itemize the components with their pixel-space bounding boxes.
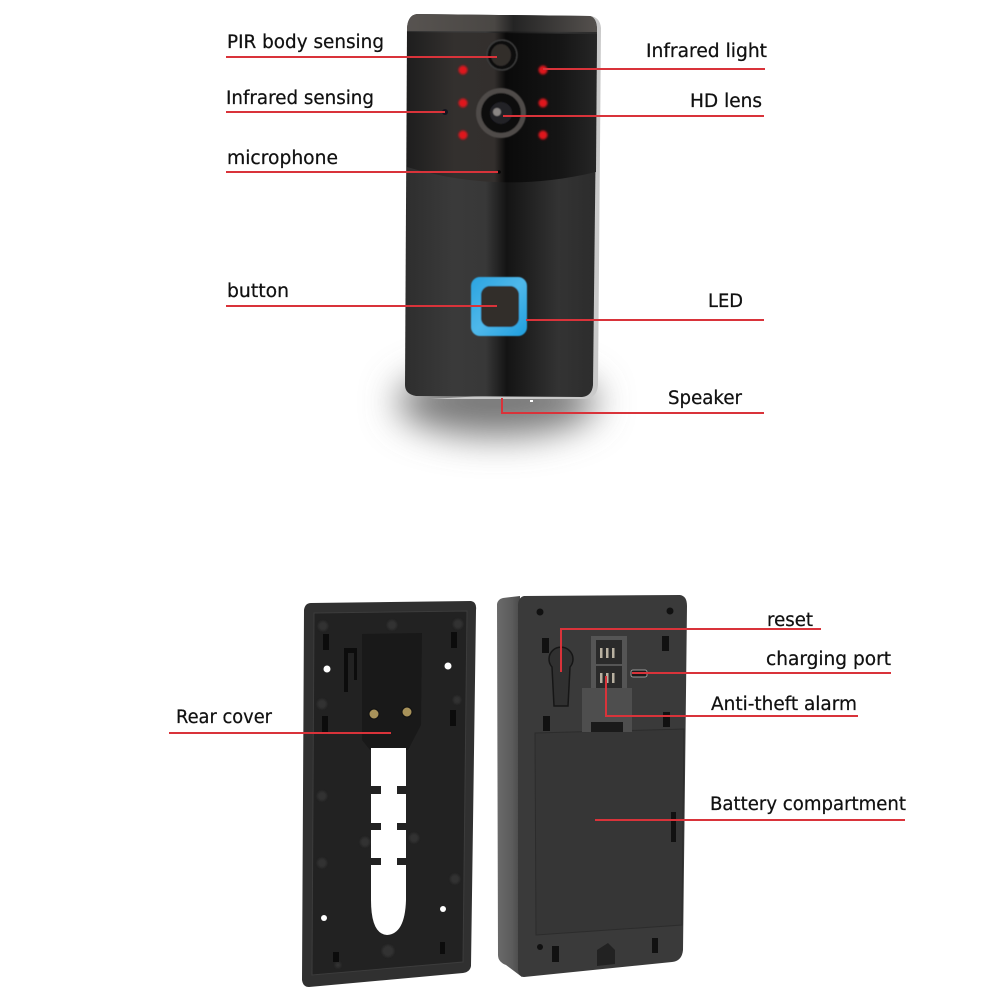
- keyhole mount: [549, 647, 573, 706]
- side wall: [497, 596, 522, 977]
- silver side edge: [430, 16, 601, 399]
- label: Speaker: Speaker: [668, 388, 742, 409]
- tamper tab: [582, 688, 632, 732]
- label: PIR body sensing: PIR body sensing: [227, 32, 384, 53]
- label: microphone: microphone: [227, 148, 338, 169]
- back of doorbell: [497, 595, 687, 977]
- brass screws: [369, 707, 412, 719]
- mounting plate: [362, 633, 422, 750]
- blue LED button: [471, 277, 527, 336]
- plate outline: [302, 601, 476, 987]
- screw holes: [321, 662, 452, 921]
- moulding marks: [317, 619, 463, 968]
- microphone dot: [497, 170, 501, 174]
- label: Infrared light: Infrared light: [646, 41, 767, 62]
- front view doorbell: [397, 14, 601, 436]
- lens: [476, 88, 526, 138]
- switch blocks: [591, 636, 627, 696]
- infrared LEDs: [458, 66, 548, 140]
- PIR sensor: [487, 40, 517, 70]
- camera panel: [407, 32, 597, 182]
- slot opening: [371, 748, 406, 935]
- speaker dot: [530, 400, 533, 402]
- battery cover: [535, 729, 684, 935]
- callout lines: [169, 57, 905, 820]
- IR sensor dot: [442, 109, 448, 115]
- label: reset: reset: [767, 610, 813, 631]
- label: button: button: [227, 281, 289, 302]
- label: LED: LED: [708, 291, 743, 312]
- slot tabs: [369, 786, 408, 865]
- back slots: [536, 608, 676, 966]
- label: HD lens: HD lens: [690, 91, 762, 112]
- label: Rear cover: Rear cover: [176, 707, 272, 728]
- rear cover: [302, 601, 476, 987]
- drop shadow: [397, 368, 597, 436]
- label: Anti-theft alarm: Anti-theft alarm: [711, 694, 857, 715]
- inner panel: [312, 611, 467, 975]
- top band: [407, 14, 597, 32]
- clip latches: [322, 632, 457, 962]
- device body: [405, 14, 597, 397]
- label: charging port: charging port: [766, 649, 891, 670]
- label: Infrared sensing: Infrared sensing: [226, 88, 374, 109]
- label: Battery compartment: Battery compartment: [710, 794, 906, 815]
- back face: [518, 595, 687, 977]
- micro USB charging port: [631, 670, 647, 677]
